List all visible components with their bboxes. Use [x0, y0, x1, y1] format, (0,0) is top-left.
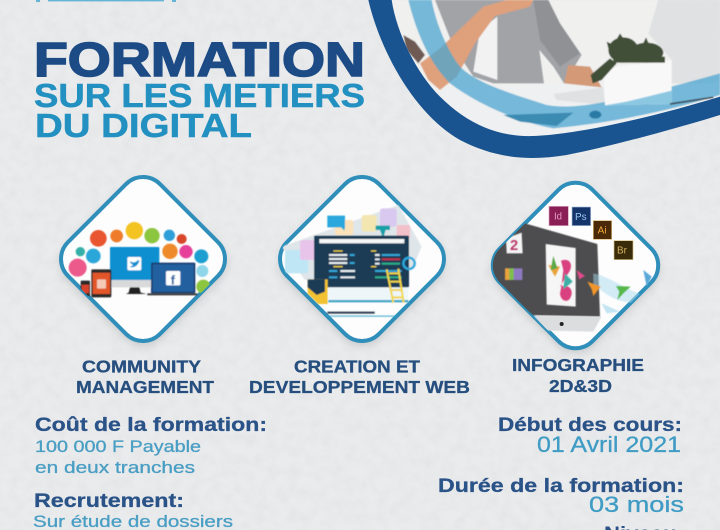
- icon: code monitor: [282, 205, 422, 317]
- side panel: [505, 233, 523, 280]
- Id badge: Id: [554, 211, 562, 222]
- office wall: [392, 0, 670, 96]
- Ai badge: Ai: [598, 226, 607, 237]
- desk surface: [672, 84, 681, 86]
- Ps badge: Ps: [575, 212, 587, 223]
- right forearm: [564, 65, 602, 87]
- grey shirt: [435, 0, 582, 83]
- white t-shirt: [473, 17, 497, 80]
- Br badge: Br: [617, 246, 628, 257]
- info: cost: [35, 414, 267, 477]
- code lines: [329, 250, 402, 278]
- course label: infographie: [512, 355, 644, 396]
- diamond frame 3: [483, 173, 668, 362]
- icon: design monitor: [487, 206, 652, 332]
- diamond frame 2: [270, 167, 454, 355]
- info: duration: [438, 475, 684, 517]
- title block: [34, 34, 365, 145]
- info: start date: Début des cours:: [498, 414, 682, 436]
- potted plant leaves: [591, 33, 665, 83]
- monitor stand base: [328, 287, 408, 303]
- colourful artwork: [548, 256, 573, 301]
- faded app tiles: [282, 205, 422, 280]
- pen on desk: [589, 111, 601, 119]
- icon: social media devices: [69, 222, 210, 297]
- laptop with f: [147, 263, 197, 295]
- info: cost: 100 000 F Payable: [35, 438, 201, 456]
- laptop with f: f: [171, 273, 176, 288]
- info: cost: en deux tranches: [35, 459, 195, 477]
- translucent light-blue ribbon: [408, 0, 720, 128]
- info: start date: 01 Avril 2021: [537, 432, 681, 457]
- Br badge: [614, 241, 633, 260]
- course label: creation web: DEVELOPPEMENT WEB: [249, 377, 470, 397]
- Ps badge: [572, 207, 591, 226]
- phone on desk: [503, 113, 573, 126]
- desktop monitor: [648, 0, 720, 84]
- Ai badge: [593, 221, 612, 239]
- title line 3: DU DIGITAL: [35, 108, 252, 145]
- gear icon: [403, 258, 415, 269]
- tablet and phone: [81, 269, 111, 297]
- monitor chin: [533, 315, 602, 332]
- folder icon: [308, 279, 328, 304]
- course label: infographie: 2D&3D: [549, 376, 612, 396]
- course label: infographie: INFOGRAPHIE: [512, 355, 644, 375]
- raised arm: [420, 0, 533, 90]
- shirt sleeve shade: [533, 0, 580, 67]
- info: duration: 03 mois: [589, 492, 684, 517]
- left sleeve and watch: [403, 35, 425, 63]
- dark blue swoosh: [368, 0, 720, 158]
- cropped tagline strip at top edge: [36, 0, 176, 2]
- course label: community management: COMMUNITY: [82, 356, 201, 376]
- photo banner: person at desk framed by blue swoosh: [360, 0, 720, 160]
- social bubbles: [69, 222, 210, 294]
- course label: creation web: CREATION ET: [294, 356, 420, 376]
- panel: web development: [276, 175, 448, 348]
- cloud icon: [376, 226, 390, 237]
- course label: creation web: [249, 356, 470, 397]
- diamond frame 1: [51, 167, 235, 355]
- monitor body: [314, 236, 409, 287]
- course label: community management: MANAGEMENT: [76, 377, 214, 397]
- Id badge: [549, 206, 568, 226]
- browser bar: [319, 239, 404, 243]
- keyboard strip: [327, 312, 375, 314]
- course label: community management: [76, 356, 214, 397]
- info: duration: Durée de la formation:: [438, 475, 684, 497]
- artboard: [546, 244, 576, 307]
- yellow ladder: [387, 269, 404, 303]
- title line 1: FORMATION: [34, 34, 365, 87]
- info: recruitment: [33, 490, 233, 530]
- info: start date: [498, 414, 682, 457]
- panel: infographie: [490, 180, 662, 356]
- white plant pot: [603, 60, 672, 105]
- apple logo: [560, 322, 564, 326]
- monitor screen: [487, 223, 600, 317]
- info: recruitment: Recrutement:: [34, 490, 184, 512]
- info: cost: Coût de la formation:: [35, 414, 267, 436]
- monitor with bird: [110, 247, 159, 294]
- laptop: [553, 87, 605, 105]
- paint splash birds: [577, 270, 652, 313]
- side panel numeral: 2: [510, 238, 518, 254]
- keyboard edge line: [670, 97, 713, 104]
- code bubble: [327, 216, 345, 231]
- pot ribbon tint: [605, 91, 672, 105]
- panel: community management: [58, 175, 228, 348]
- title line 2: SUR LES METIERS: [34, 78, 365, 115]
